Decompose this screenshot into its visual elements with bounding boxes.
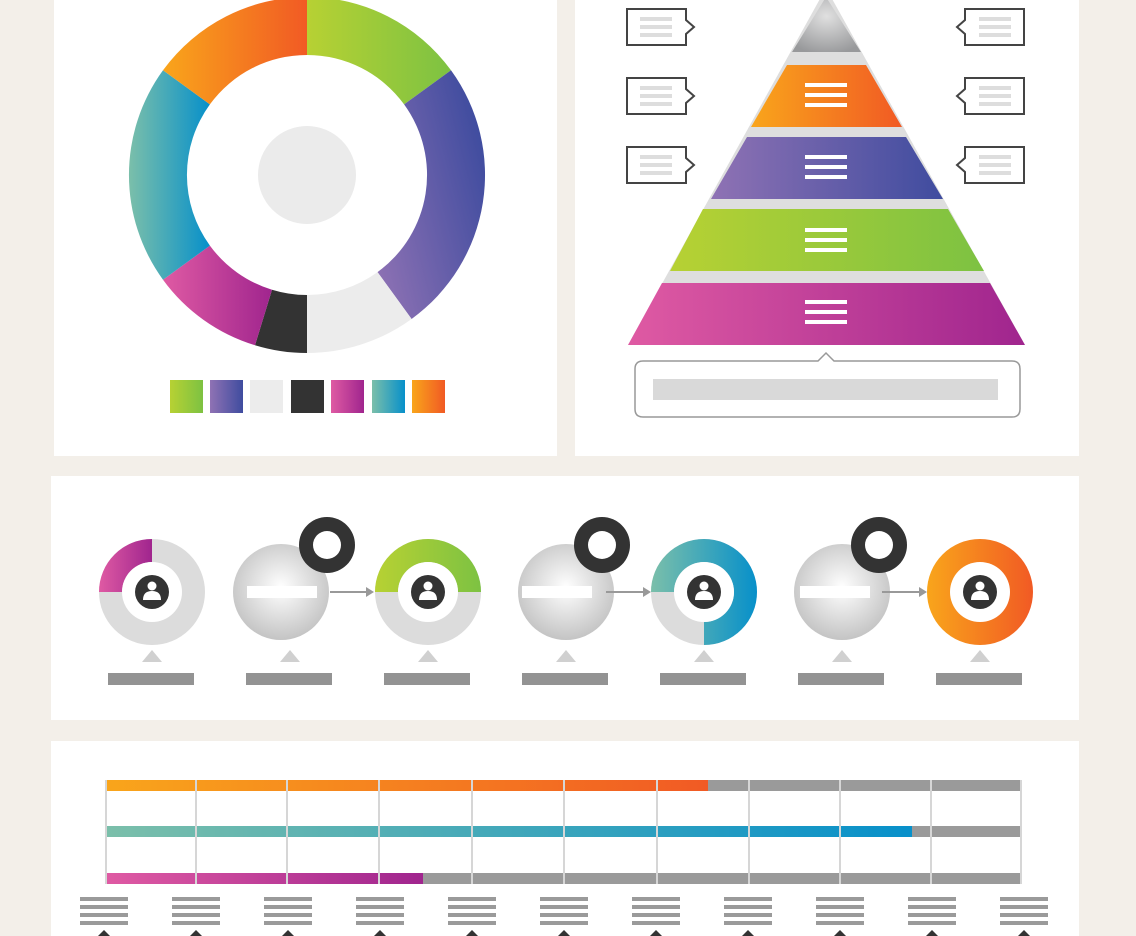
donut 1: [99, 539, 205, 645]
axis labels: [80, 897, 1048, 936]
panel: process circles: [51, 476, 1079, 720]
sphere 2: [518, 517, 630, 640]
sphere 1: [233, 517, 355, 640]
bottom callout: [635, 353, 1020, 417]
donut 3: [651, 539, 757, 645]
labels under circles: [108, 650, 1022, 685]
panel: donut chart: [54, 0, 557, 456]
legend swatches: [170, 380, 445, 413]
donut 2: [375, 539, 481, 645]
arrow 1: [330, 587, 374, 597]
sphere 3: [794, 517, 907, 640]
bar chart: [106, 780, 1021, 884]
callouts right: [957, 9, 1024, 183]
panel: bar chart: [51, 741, 1079, 936]
donut 4: [927, 539, 1033, 645]
panel: pyramid: [575, 0, 1079, 456]
arrow 3: [882, 587, 927, 597]
pyramid: [628, 0, 1025, 345]
arrow 2: [606, 587, 651, 597]
callouts left: [627, 9, 694, 183]
donut chart: [129, 0, 485, 353]
